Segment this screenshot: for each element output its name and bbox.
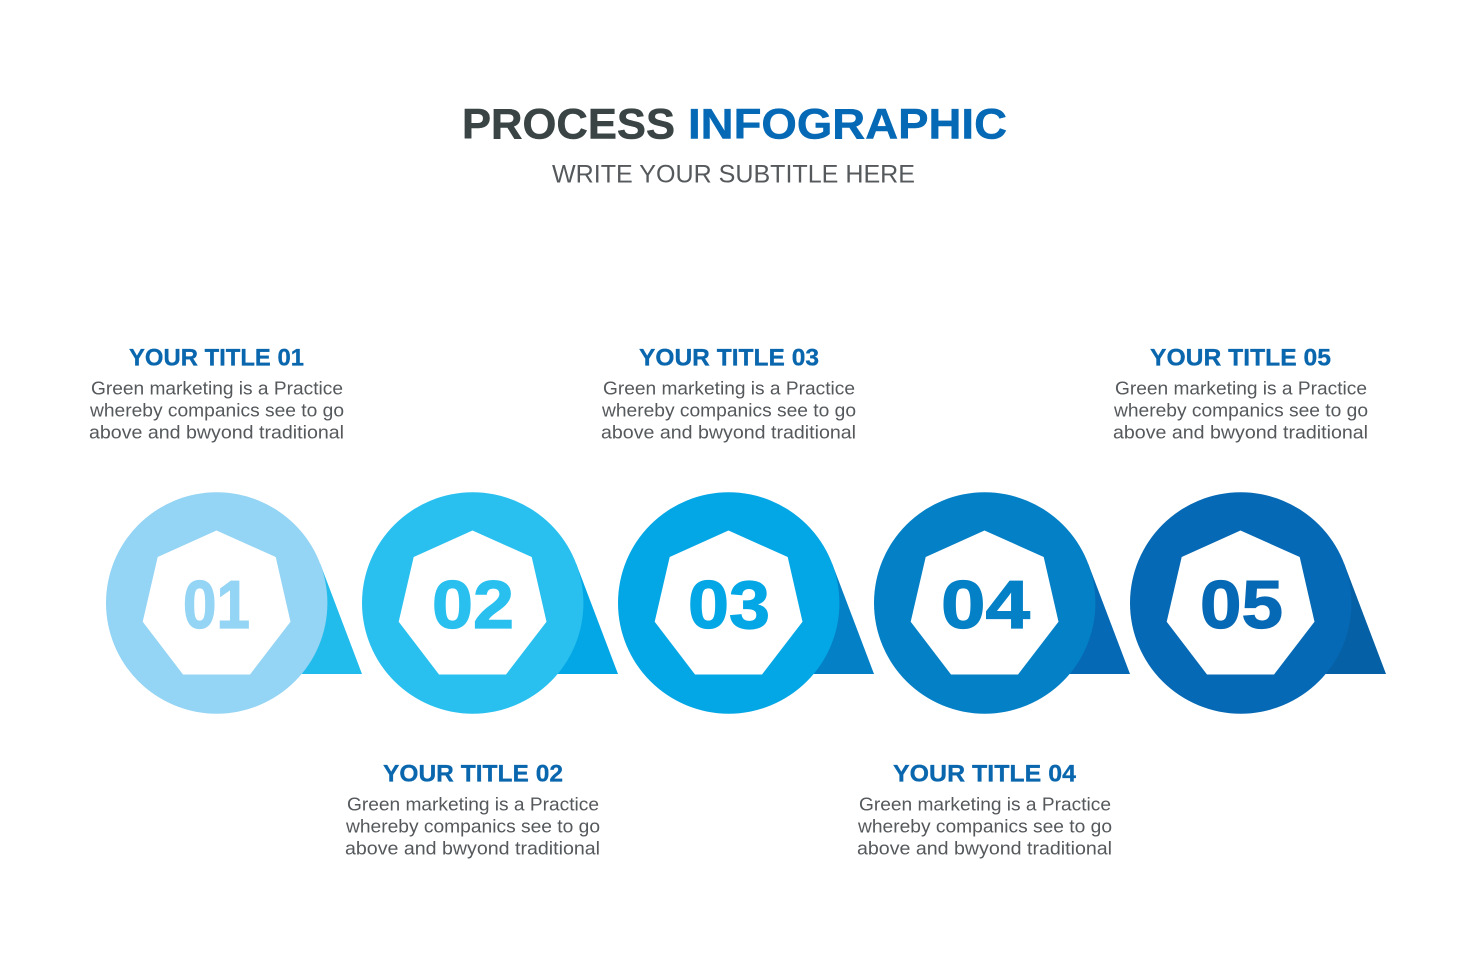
step 02 pin: [362, 492, 618, 714]
step 05 pin: [1130, 492, 1386, 714]
text block: title 02: whereby companics see to go: [345, 816, 600, 836]
step 04 pin: [874, 492, 1130, 714]
title: [462, 100, 1007, 148]
text block: title 04: [857, 760, 1112, 858]
text block: title 02: above and bwyond traditional: [345, 838, 600, 858]
step 05 pin: 05: [1200, 567, 1283, 643]
text block: title 03: Green marketing is a Practice: [603, 378, 855, 398]
text block: title 05: above and bwyond traditional: [1113, 422, 1368, 442]
subtitle: WRITE YOUR SUBTITLE HERE: [552, 160, 915, 188]
text block: title 04: YOUR TITLE 04: [893, 760, 1077, 788]
step 01 pin: 01: [183, 567, 250, 643]
text block: title 01: Green marketing is a Practice: [91, 378, 343, 398]
text block: title 04: whereby companics see to go: [857, 816, 1112, 836]
title: PROCESS: [462, 100, 675, 148]
text block: title 04: above and bwyond traditional: [857, 838, 1112, 858]
text block: title 01: whereby companics see to go: [89, 400, 344, 420]
text block: title 03: YOUR TITLE 03: [639, 344, 819, 372]
title: INFOGRAPHIC: [688, 100, 1007, 148]
text block: title 02: Green marketing is a Practice: [347, 794, 599, 814]
text block: title 03: [601, 344, 856, 442]
text block: title 01: YOUR TITLE 01: [129, 344, 304, 372]
text block: title 03: above and bwyond traditional: [601, 422, 856, 442]
text block: title 05: Green marketing is a Practice: [1115, 378, 1367, 398]
text block: title 02: [345, 760, 600, 858]
step 03 pin: [618, 492, 874, 714]
text block: title 04: Green marketing is a Practice: [859, 794, 1111, 814]
text block: title 05: whereby companics see to go: [1113, 400, 1368, 420]
step 04 pin: 04: [941, 567, 1030, 643]
step 01 pin: [106, 492, 362, 714]
text block: title 01: [89, 344, 344, 442]
text block: title 05: [1113, 344, 1368, 442]
step 02 pin: 02: [432, 567, 514, 643]
text block: title 05: YOUR TITLE 05: [1150, 344, 1331, 372]
step 03 pin: 03: [688, 567, 770, 643]
text block: title 02: YOUR TITLE 02: [383, 760, 563, 788]
text block: title 03: whereby companics see to go: [601, 400, 856, 420]
text block: title 01: above and bwyond traditional: [89, 422, 344, 442]
